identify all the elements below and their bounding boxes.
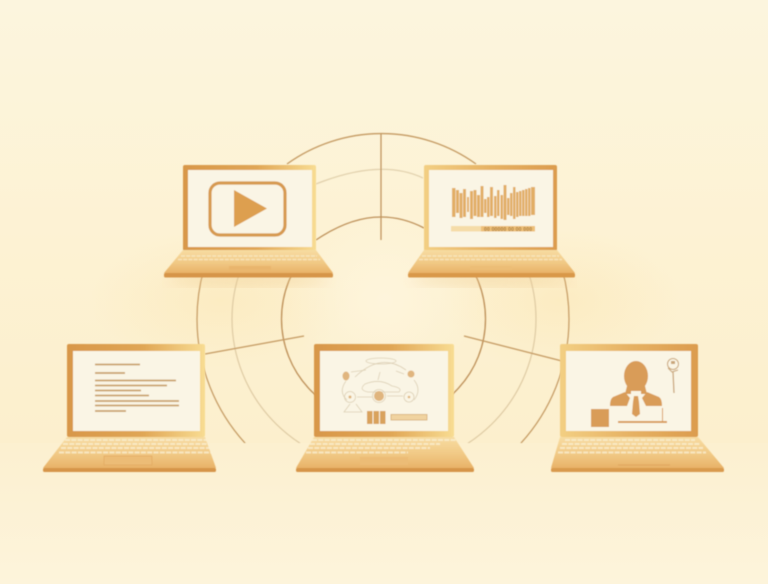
text lines bbox=[95, 364, 179, 411]
trackpad bbox=[618, 464, 670, 466]
laptop: video player bbox=[164, 165, 333, 286]
keyboard bbox=[59, 440, 213, 452]
warm glow behind laptops bbox=[90, 210, 680, 390]
screen frame bbox=[67, 344, 205, 437]
screen frame bbox=[560, 344, 698, 437]
middle ring top arc bbox=[316, 169, 423, 184]
trackpad bbox=[104, 456, 152, 465]
icon: waveform bbox=[452, 185, 535, 220]
diagram bbox=[342, 358, 418, 412]
front edge bbox=[164, 273, 333, 278]
collar bbox=[631, 391, 641, 396]
screen bbox=[188, 170, 312, 247]
floor bbox=[0, 443, 768, 584]
keyboard bbox=[178, 256, 320, 260]
base bbox=[551, 437, 724, 468]
screen bbox=[566, 351, 691, 431]
left spoke bbox=[205, 336, 304, 354]
screen frame bbox=[314, 344, 454, 437]
laptop: text document bbox=[43, 344, 216, 472]
inner ring top arc bbox=[316, 217, 424, 240]
status bar bbox=[391, 414, 427, 420]
front edge bbox=[408, 273, 575, 278]
laptop: presenter bbox=[551, 344, 724, 472]
audio progress bar bbox=[451, 226, 535, 233]
icon: presenter bbox=[591, 361, 667, 427]
trackpad bbox=[360, 457, 408, 465]
base bbox=[296, 437, 474, 468]
audio progress bar: 00 00000 00 00 000 bbox=[484, 227, 532, 233]
side box bbox=[591, 409, 609, 427]
screen frame bbox=[424, 165, 557, 251]
lectern bbox=[618, 421, 667, 423]
inner ring lower arcs bbox=[280, 277, 487, 396]
screen bbox=[429, 170, 553, 247]
screen bbox=[73, 351, 200, 431]
screen frame bbox=[183, 165, 316, 251]
diagram nodes bbox=[342, 370, 414, 401]
vertical spoke bbox=[380, 134, 382, 240]
laptop: network diagram bbox=[296, 344, 474, 472]
base bbox=[164, 250, 333, 273]
base bbox=[43, 437, 216, 468]
outer ring lower arcs bbox=[196, 277, 570, 444]
icon: microphone headset bbox=[668, 358, 678, 393]
server stack bbox=[367, 411, 386, 424]
screen bbox=[320, 351, 448, 431]
front edge bbox=[43, 468, 216, 472]
base bbox=[408, 250, 575, 273]
trackpad bbox=[470, 266, 512, 270]
middle ring lower arcs bbox=[231, 278, 537, 444]
trackpad bbox=[229, 266, 271, 270]
keyboard bbox=[419, 256, 562, 260]
laptop: audio waveform bbox=[408, 165, 575, 286]
keyboard bbox=[306, 440, 456, 452]
icon: play button bbox=[210, 183, 285, 235]
network circles and spokes bbox=[196, 132, 570, 444]
background wall bbox=[0, 0, 768, 444]
outer ring top arc bbox=[287, 134, 476, 164]
right spoke bbox=[464, 336, 562, 361]
front edge bbox=[296, 468, 474, 472]
keyboard bbox=[558, 440, 706, 452]
front edge bbox=[551, 468, 724, 472]
